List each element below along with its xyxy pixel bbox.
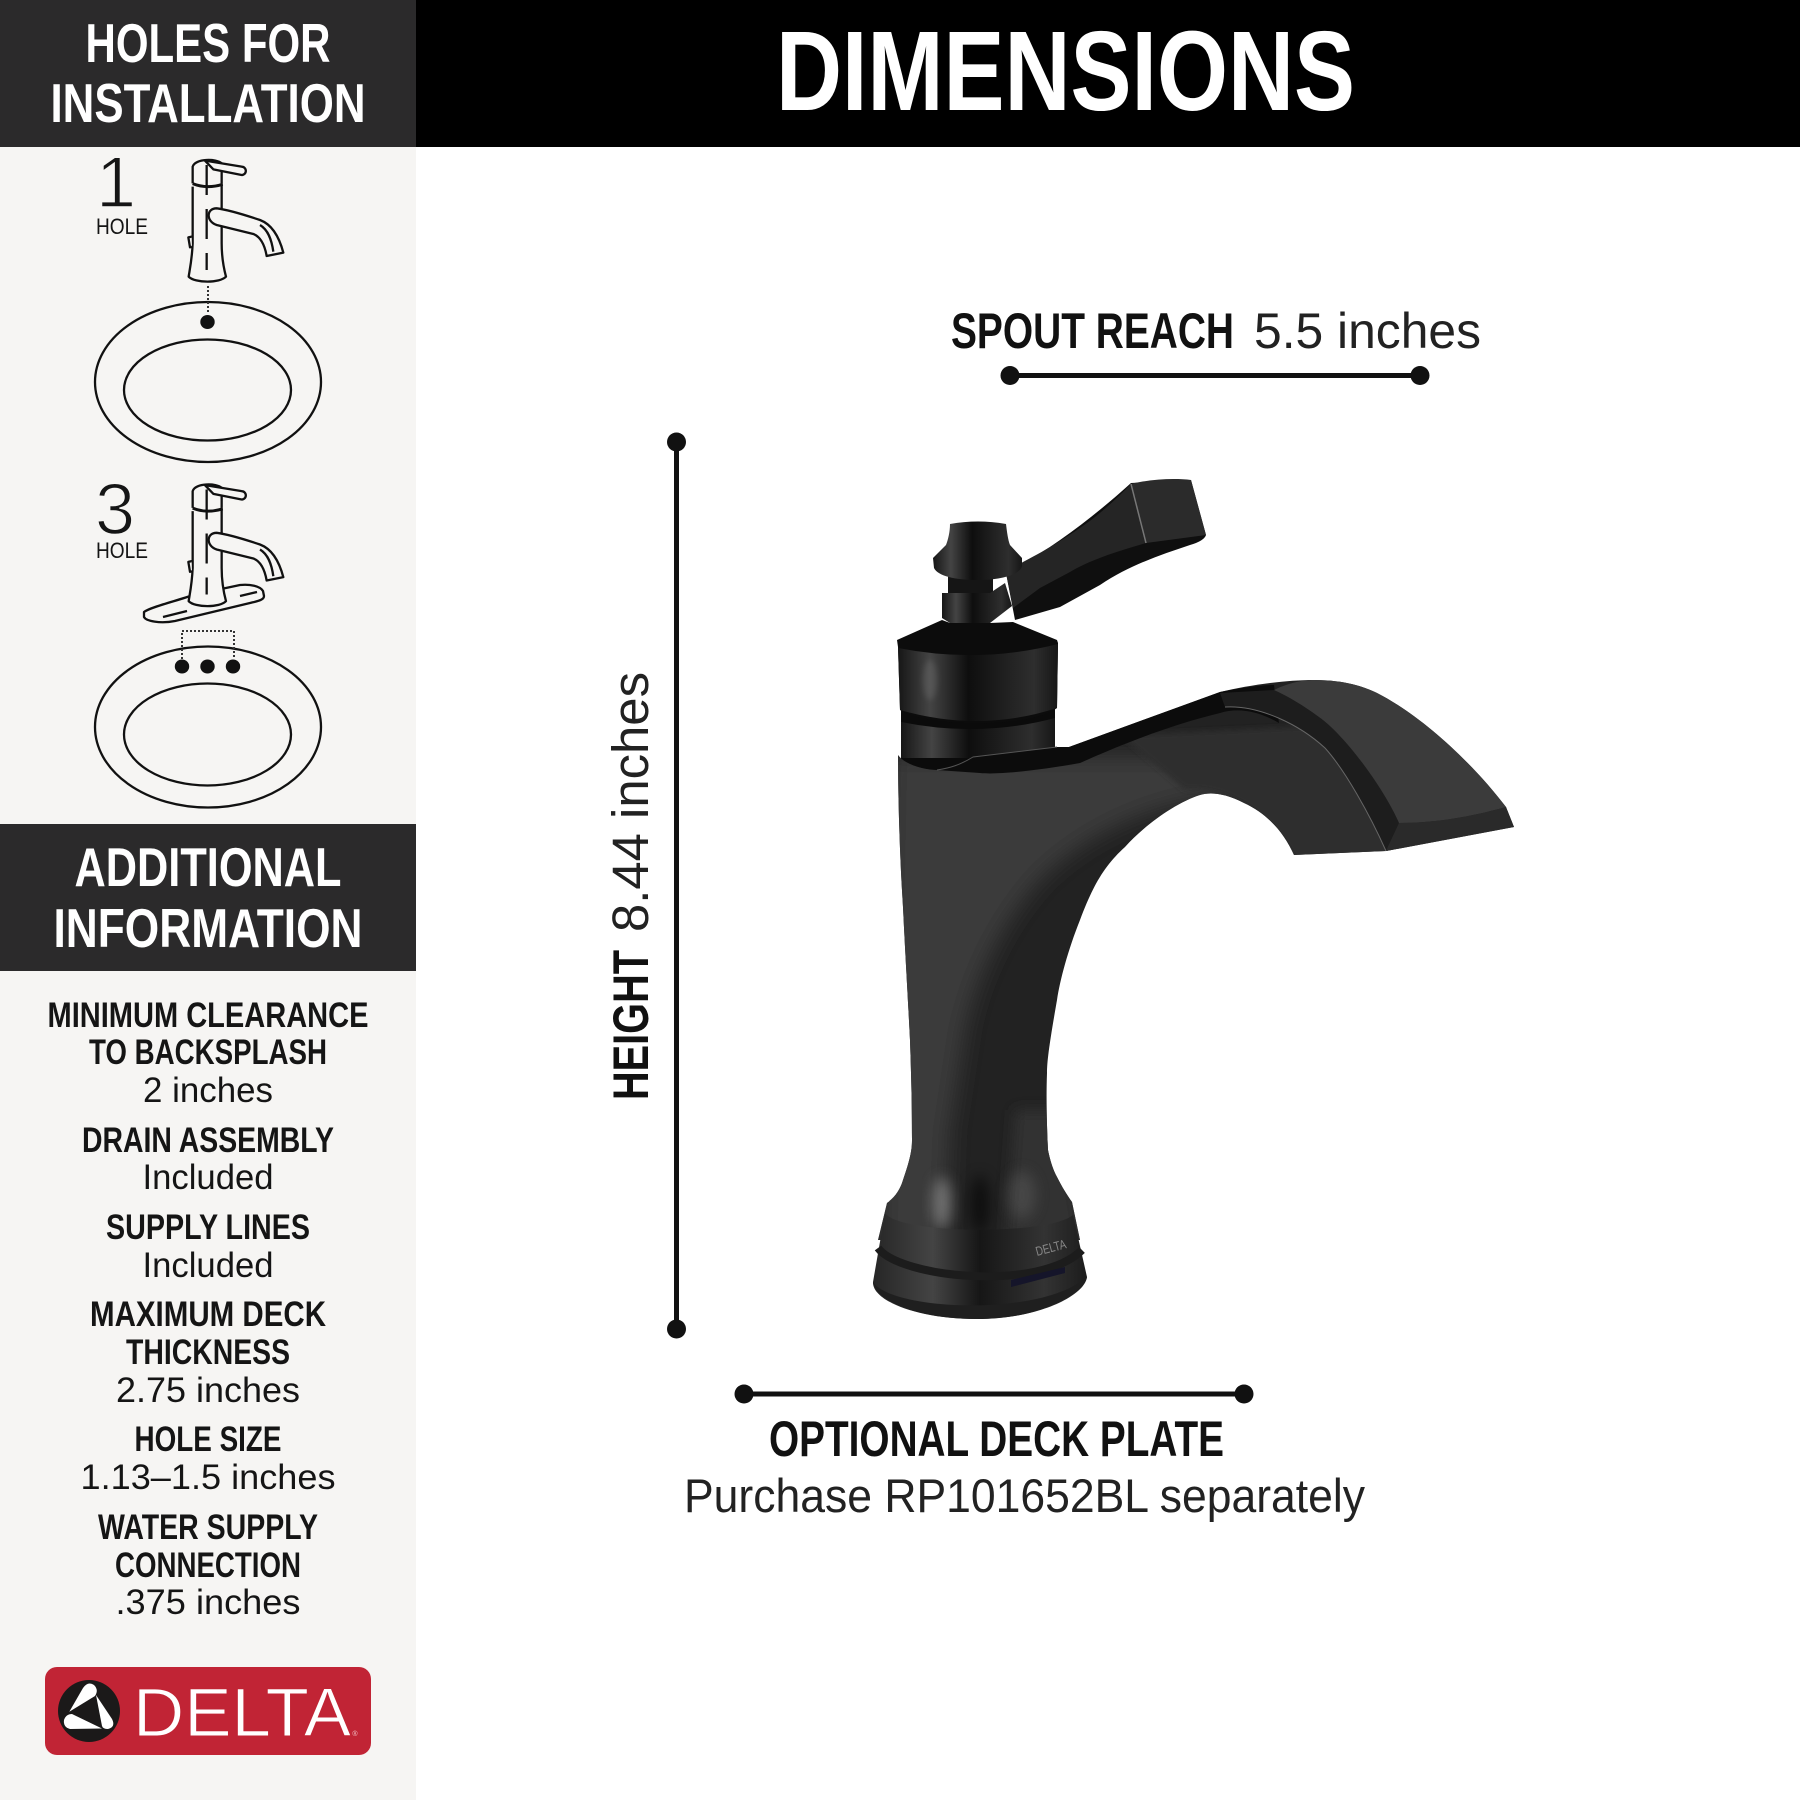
label: 3 hole: [95, 470, 148, 563]
logo: Delta: [45, 1667, 371, 1755]
label: 3 hole: HOLE: [96, 538, 148, 563]
faucet body and spout: [878, 680, 1514, 1240]
text: hole size: [80, 1420, 336, 1497]
icon: three hole sink: [95, 631, 321, 808]
text: minimum clearance: MINIMUM CLEARANCE: [48, 996, 368, 1035]
text: minimum clearance: 2 inches: [143, 1071, 273, 1110]
spout reach dimension: SPOUT REACH: [951, 303, 1234, 359]
header: additional information: ADDITIONAL: [74, 836, 342, 898]
header: holes for installation: [0, 0, 416, 147]
icon: single hole faucet: [188, 160, 283, 282]
faucet spout head: [1274, 680, 1506, 823]
text: drain assembly: Included: [142, 1158, 274, 1197]
text: drain assembly: DRAIN ASSEMBLY: [82, 1121, 334, 1160]
icon: single hole sink: [95, 286, 321, 462]
header: holes for installation: INSTALLATION: [50, 72, 366, 134]
text: maximum deck thickness: THICKNESS: [126, 1333, 290, 1372]
sidebar panel: [0, 0, 416, 1800]
logo: Delta: ®: [352, 1730, 358, 1738]
text: maximum deck thickness: 2.75 inches: [116, 1371, 300, 1410]
header: additional information: [0, 824, 416, 971]
text: supply lines: Included: [142, 1246, 274, 1285]
title banner: dimensions: DIMENSIONS: [776, 8, 1355, 134]
text: water supply connection: .375 inches: [116, 1583, 300, 1622]
faucet base: DELTA: [1034, 1236, 1068, 1259]
label: 1 hole: [96, 143, 148, 239]
faucet base: [873, 1213, 1087, 1319]
optional deck plate dimension: Purchase RP101652BL separately: [684, 1469, 1365, 1522]
text: minimum clearance: TO BACKSPLASH: [89, 1033, 327, 1072]
text: maximum deck thickness: MAXIMUM DECK: [90, 1295, 326, 1334]
faucet finial knob: [933, 522, 1022, 623]
faucet upper cylinder: [897, 620, 1058, 770]
text: water supply connection: CONNECTION: [115, 1546, 301, 1585]
icon: three hole faucet: [188, 484, 283, 606]
text: water supply connection: WATER SUPPLY: [98, 1508, 318, 1547]
height dimension: [602, 432, 686, 1338]
label: 1 hole: 1: [96, 143, 136, 223]
title banner: dimensions: [416, 0, 1800, 147]
label: 1 hole: HOLE: [96, 214, 148, 239]
header: additional information: INFORMATION: [54, 897, 362, 959]
faucet spout tip: [1386, 807, 1514, 851]
text: drain assembly: [82, 1121, 334, 1197]
text: supply lines: [106, 1208, 310, 1285]
faucet photo: [870, 479, 1530, 1319]
faucet cylinder highlight: [923, 660, 937, 700]
height dimension: 8.44 inches: [602, 672, 659, 932]
text: minimum clearance: [48, 996, 368, 1110]
text: water supply connection: [98, 1508, 318, 1622]
spout reach dimension: 5.5 inches: [1254, 303, 1481, 359]
text: hole size: HOLE SIZE: [134, 1420, 282, 1459]
faucet spout ridge: [937, 685, 1279, 773]
text: supply lines: SUPPLY LINES: [106, 1208, 310, 1247]
optional deck plate dimension: OPTIONAL DECK PLATE: [769, 1411, 1224, 1467]
icon: three hole deck plate: [144, 585, 264, 622]
label: 3 hole: 3: [95, 470, 135, 550]
spout reach dimension: [951, 303, 1481, 385]
optional deck plate dimension: [684, 1384, 1365, 1522]
faucet spout band: [1220, 690, 1399, 851]
text: maximum deck thickness: [90, 1295, 326, 1410]
text: hole size: 1.13–1.5 inches: [80, 1458, 336, 1497]
faucet lever handle: [1006, 479, 1206, 620]
height dimension: HEIGHT: [603, 950, 659, 1100]
header: holes for installation: HOLES FOR: [86, 12, 330, 74]
logo: Delta: DELTA: [133, 1674, 351, 1751]
